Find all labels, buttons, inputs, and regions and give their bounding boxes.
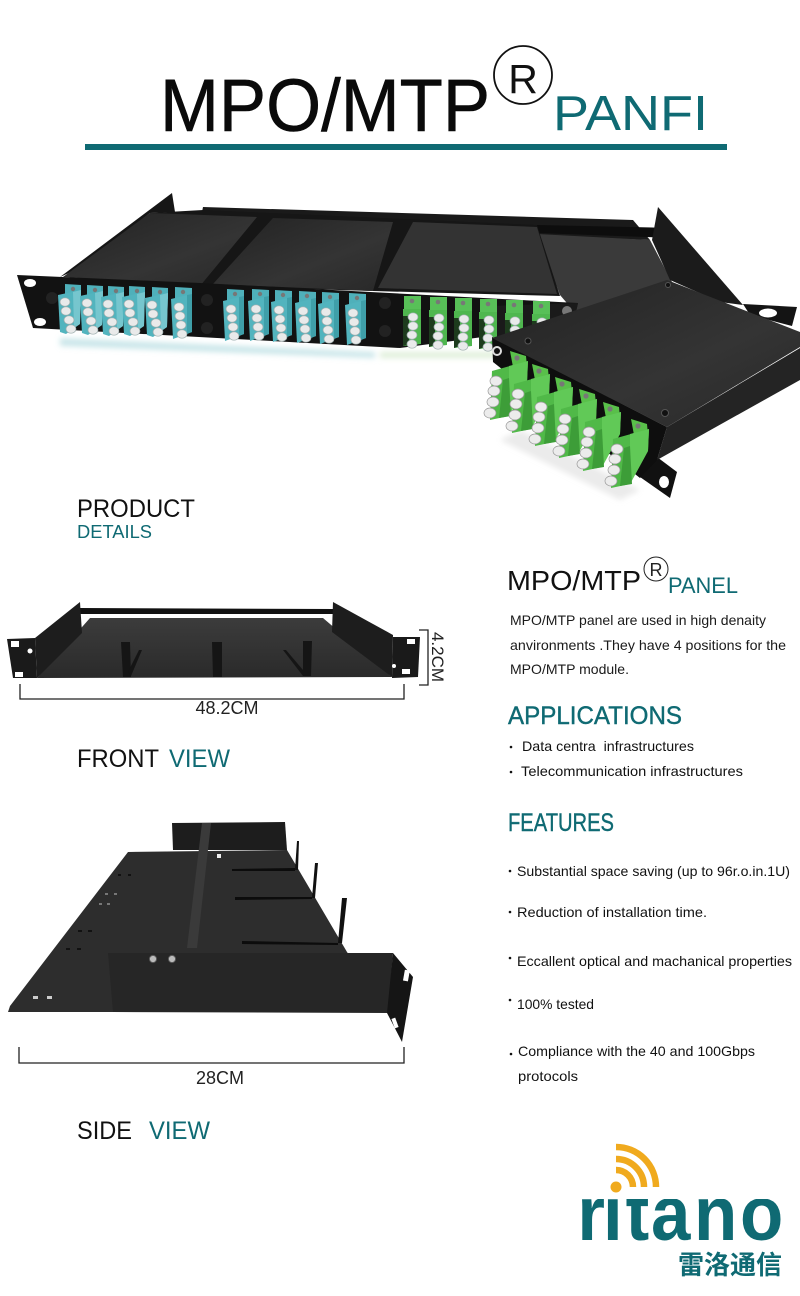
heading: product details: DETAILS	[77, 522, 152, 542]
ears	[7, 638, 37, 678]
brackets	[121, 642, 131, 677]
green adapters loose module	[484, 351, 649, 488]
panel heading: R	[650, 560, 662, 580]
title: MPO/MTP PANFI: PANFI	[553, 87, 708, 141]
green adapters module 3	[403, 296, 550, 353]
side view photo with dimension	[8, 822, 413, 1088]
heading: front view: FRONT	[77, 745, 159, 773]
width dimension bracket	[19, 1047, 404, 1063]
features list: protocols	[518, 1068, 578, 1084]
applications list	[510, 738, 743, 779]
heading: product details	[77, 495, 195, 542]
features list: 100% tested	[517, 996, 594, 1012]
features list: Reduction of installation time.	[517, 904, 707, 920]
logo Chinese name: 雷洛通信	[678, 1250, 782, 1280]
teal adapters module 1	[58, 284, 192, 339]
heading: product details: PRODUCT	[77, 495, 195, 523]
brackets	[232, 868, 295, 871]
panel description	[510, 612, 786, 677]
logo wordmark: ritano	[577, 1170, 783, 1257]
height dimension bracket	[419, 630, 428, 685]
title: MPO/MTP PANFI: R	[508, 56, 538, 102]
floor holes	[33, 854, 221, 999]
title: MPO/MTP PANFI: MPO/MTP	[160, 64, 490, 147]
reflection shadows	[60, 338, 640, 500]
teal adapters module 2	[223, 289, 366, 345]
panel description: MPO/MTP panel are used in high denaity	[510, 612, 766, 628]
features heading: FEATURES	[508, 809, 614, 837]
ear	[387, 953, 413, 1042]
label 4.2CM: 4.2CM	[428, 632, 447, 682]
dark rack interior behind modules	[150, 210, 560, 296]
applications list: Telecommunication infrastructures	[521, 763, 743, 779]
screws	[149, 955, 157, 963]
features list: Substantial space saving (up to 96r.o.in.1U)	[517, 863, 790, 879]
panel heading: MPO/MTP	[507, 565, 641, 596]
label 48.2CM: 48.2CM	[195, 698, 259, 718]
front view photo with dimensions	[7, 602, 447, 718]
rack side walls	[60, 193, 175, 277]
label 28CM: 28CM	[196, 1068, 244, 1088]
title underline	[85, 144, 727, 150]
heading: side view	[77, 1117, 210, 1145]
panel heading: PANEL	[668, 573, 738, 598]
heading: side view: SIDE	[77, 1117, 132, 1145]
rack floor	[37, 618, 392, 678]
panel description: anvironments .They have 4 positions for the	[510, 637, 786, 653]
loose module	[484, 280, 800, 498]
heading: front view	[77, 745, 230, 773]
features list	[509, 863, 792, 1084]
title: MPO/MTP PANFI	[160, 46, 708, 147]
rear bar	[80, 608, 333, 614]
width dimension bracket	[20, 684, 404, 699]
back wall	[172, 822, 287, 850]
panel description: MPO/MTP module.	[510, 661, 629, 677]
front wall	[108, 953, 393, 1013]
applications heading: APPLICATIONS	[508, 702, 682, 730]
features list: Eccallent optical and machanical properties	[517, 953, 792, 969]
rack back bar and floor	[200, 207, 650, 240]
right ear	[743, 304, 797, 326]
center rail	[187, 823, 211, 948]
logo signal icon	[610, 1147, 656, 1192]
features list: Compliance with the 40 and 100Gbps	[518, 1043, 755, 1059]
hero product photo: rack panel with modules	[17, 193, 800, 500]
heading: front view: VIEW	[169, 745, 230, 773]
logo: ritano	[577, 1147, 783, 1280]
applications list: Data centra infrastructures	[522, 738, 694, 754]
side walls	[35, 602, 82, 678]
rack front faceplate	[17, 275, 578, 348]
module tops	[63, 213, 257, 286]
heading: side view: VIEW	[149, 1117, 210, 1145]
panel heading	[507, 557, 738, 598]
floor	[8, 850, 388, 1012]
